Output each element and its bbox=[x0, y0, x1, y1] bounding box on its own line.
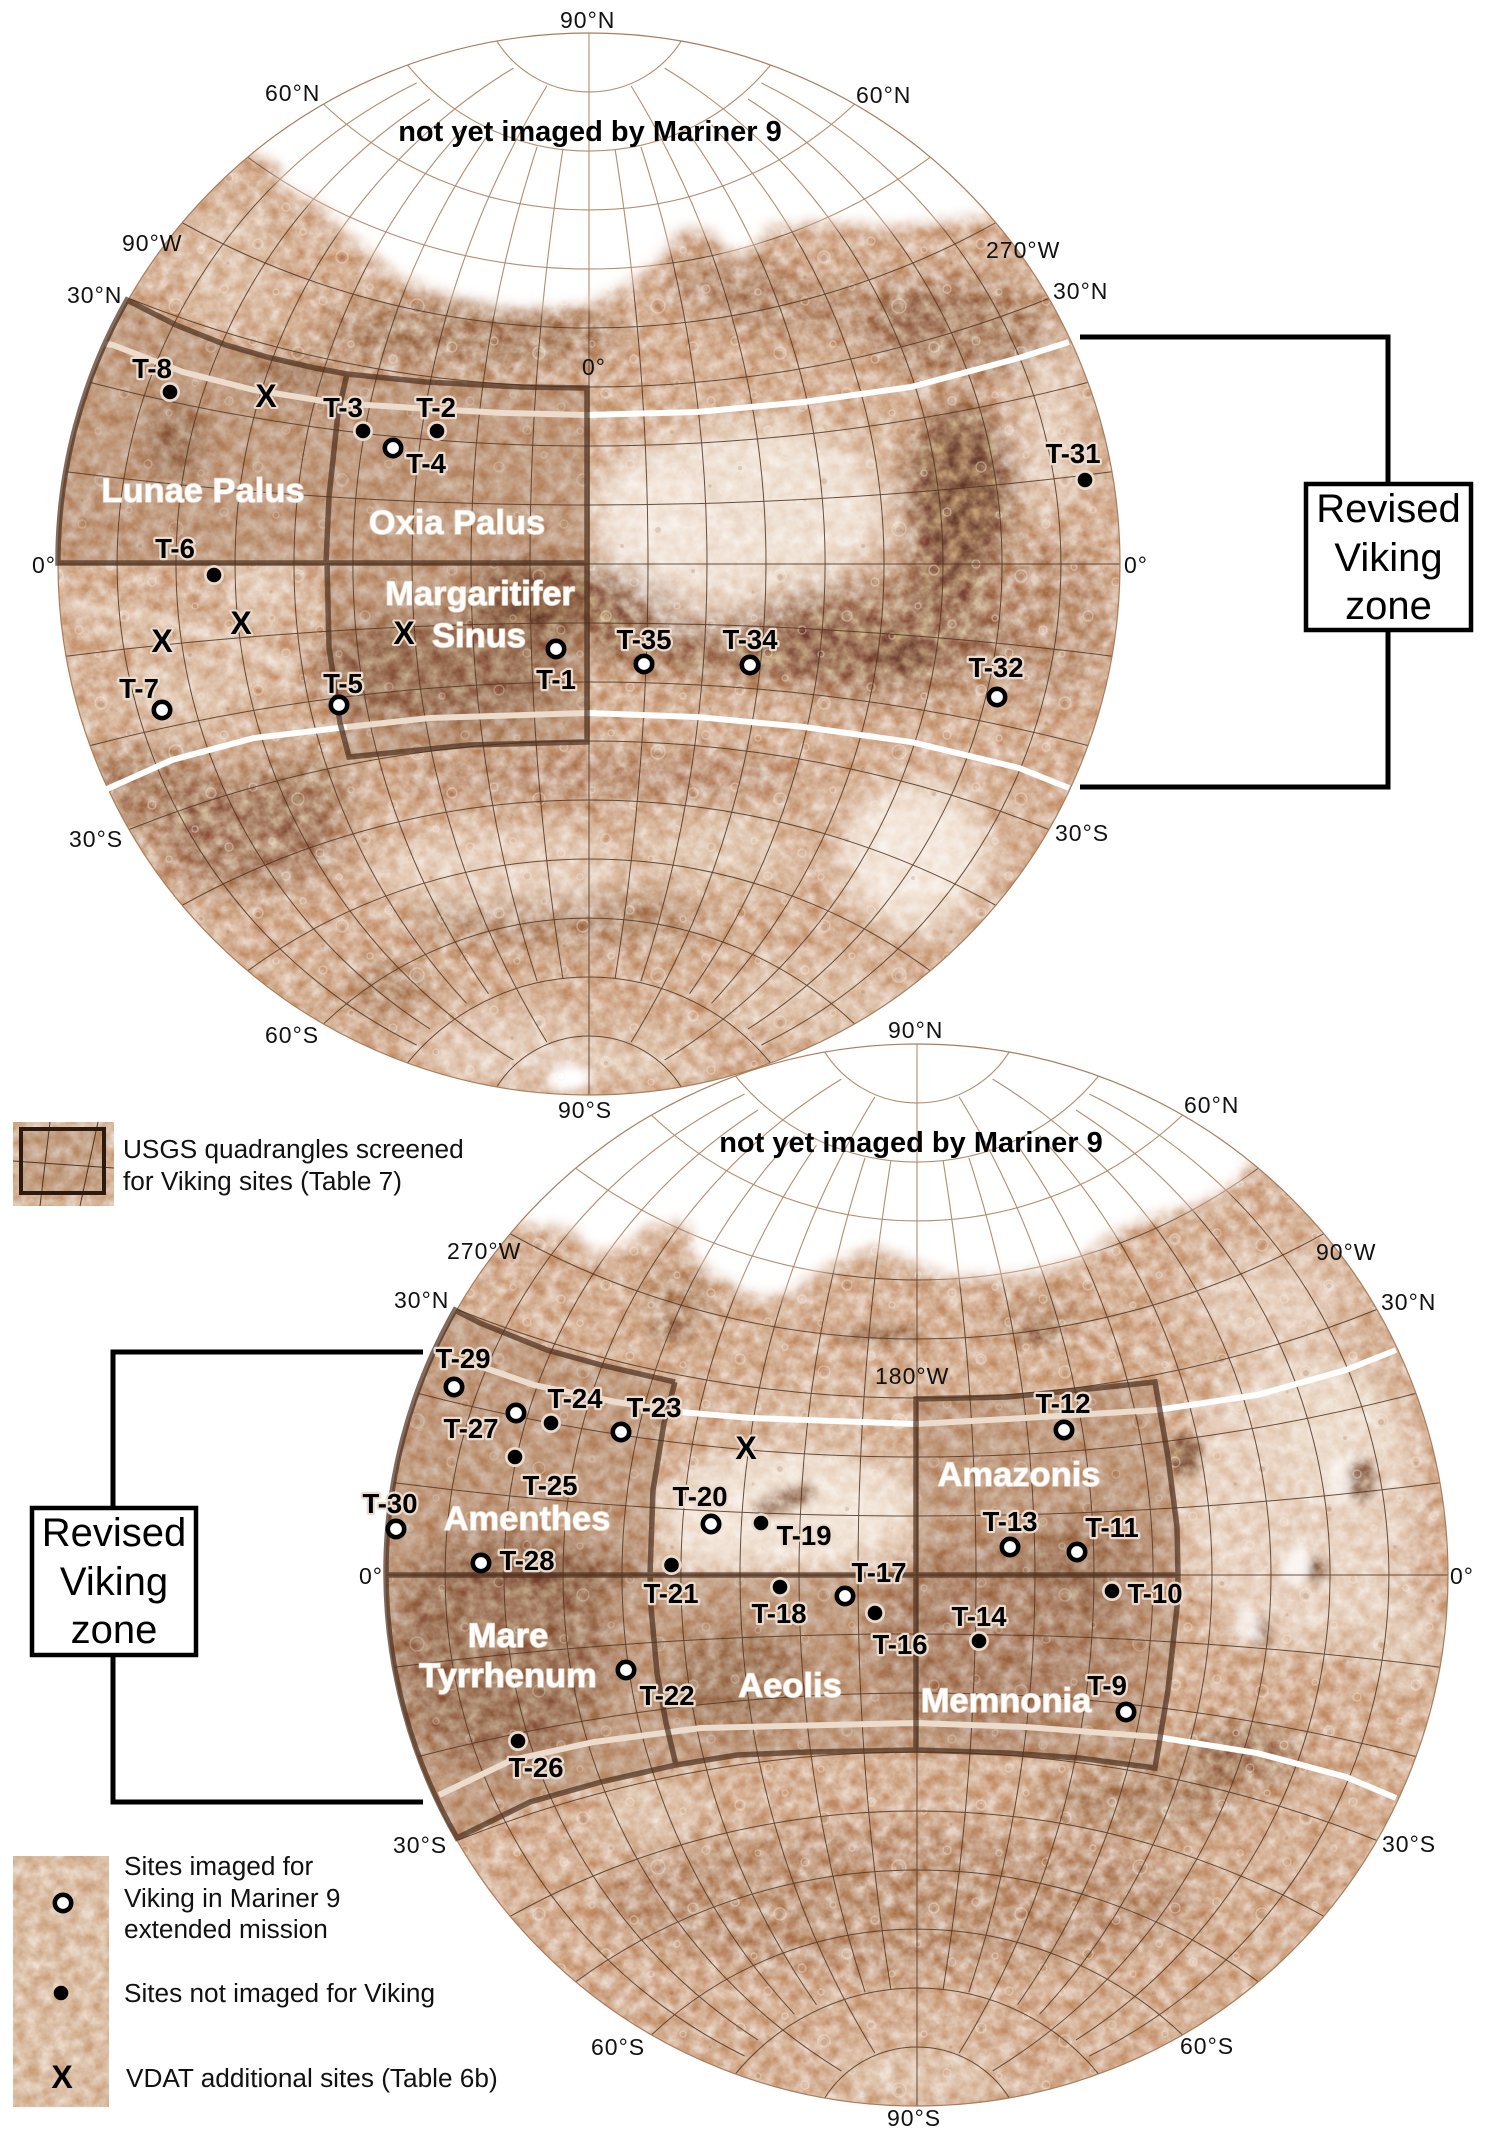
grid labels: 0° bbox=[1124, 552, 1148, 578]
site T-7: T-7 bbox=[119, 673, 159, 704]
grid labels: 90°S bbox=[558, 1097, 612, 1123]
site T-1: T-1 bbox=[536, 664, 576, 695]
site T-1 bbox=[536, 641, 576, 695]
site T-25 bbox=[505, 1447, 578, 1501]
not-yet-imaged caption: not yet imaged by Mariner 9 bbox=[398, 116, 782, 148]
site T-26 bbox=[508, 1731, 564, 1783]
site T-6 bbox=[155, 533, 224, 585]
site T-29: T-29 bbox=[435, 1343, 491, 1374]
site T-27: T-27 bbox=[443, 1413, 499, 1444]
grid labels: 30°S bbox=[393, 1832, 447, 1858]
grid labels: 90°W bbox=[122, 230, 182, 256]
site T-30 bbox=[362, 1488, 418, 1537]
grid labels: 270°W bbox=[986, 237, 1060, 263]
site T-6: T-6 bbox=[155, 533, 195, 564]
region names: Aeolis bbox=[738, 1667, 842, 1705]
region names: Lunae Palus bbox=[101, 472, 305, 510]
site T-23: T-23 bbox=[626, 1392, 682, 1423]
site T-9 bbox=[1087, 1670, 1134, 1720]
site T-31 bbox=[1045, 438, 1101, 490]
site T-11 bbox=[1069, 1512, 1139, 1560]
region names: Mare bbox=[468, 1617, 548, 1655]
site T-21 bbox=[643, 1555, 699, 1609]
zone line: 30S part within quadrangle bbox=[347, 713, 587, 727]
site T-17: T-17 bbox=[851, 1557, 907, 1588]
box: Revised Viking zone, bottom map: Viking bbox=[60, 1560, 168, 1604]
site T-19 bbox=[751, 1513, 832, 1551]
site T-35: T-35 bbox=[616, 624, 672, 655]
VDAT additional sites: X bbox=[151, 623, 173, 659]
site T-32 bbox=[968, 652, 1024, 705]
box: Revised Viking zone, top map: Viking bbox=[1334, 536, 1443, 580]
legend: site symbols bbox=[13, 1851, 498, 2107]
site T-31: T-31 bbox=[1045, 438, 1101, 469]
grid labels: 0° bbox=[1450, 1563, 1474, 1589]
site T-14 bbox=[951, 1601, 1007, 1651]
legend: USGS quadrangles: USGS quadrangles screened bbox=[123, 1134, 464, 1164]
site T-34 bbox=[722, 624, 778, 673]
site T-20 bbox=[672, 1481, 728, 1532]
site T-22 bbox=[618, 1662, 695, 1711]
legend text bbox=[124, 1851, 498, 2093]
zone line: 30N east white bbox=[1157, 1350, 1396, 1410]
site T-11: T-11 bbox=[1085, 1512, 1139, 1543]
zone line: 30S within quadrangles bbox=[439, 1723, 1157, 1795]
site T-4: T-4 bbox=[406, 448, 447, 479]
zone line: 30N west within quadrangle bbox=[435, 1353, 680, 1412]
site T-12 bbox=[1035, 1388, 1091, 1438]
site T-17 bbox=[837, 1557, 907, 1604]
site T-2: T-2 bbox=[416, 392, 456, 423]
site T-13 bbox=[982, 1506, 1038, 1555]
zone line: 30S white bbox=[107, 727, 347, 789]
legend text: VDAT additional sites (Table 6b) bbox=[126, 2063, 498, 2093]
grid labels: 180°W bbox=[875, 1363, 949, 1389]
zone line: 30S east white bbox=[1157, 1737, 1396, 1798]
grid labels: 0° bbox=[359, 1563, 383, 1589]
site T-7 bbox=[119, 673, 170, 718]
site T-9: T-9 bbox=[1087, 1670, 1127, 1701]
legend symbol: VDAT site: X bbox=[51, 2059, 73, 2095]
legend text: extended mission bbox=[124, 1914, 328, 1944]
region names bbox=[419, 1456, 1100, 1720]
grid labels: 30°N bbox=[1381, 1289, 1436, 1315]
site T-28: T-28 bbox=[499, 1545, 555, 1576]
grid labels: 90°N bbox=[888, 1017, 943, 1043]
grid labels: 60°S bbox=[265, 1022, 319, 1048]
bracket: revised Viking zone, bottom map bbox=[113, 1352, 423, 1802]
zone line: 30N white bbox=[587, 342, 1069, 415]
zone line: 30N part within quadrangles bbox=[105, 344, 587, 415]
box: Revised Viking zone, bottom map: Revised bbox=[42, 1511, 186, 1555]
grid labels: 90°W bbox=[1316, 1239, 1376, 1265]
bottom globe: Mars hemisphere centred on 180° bbox=[359, 1017, 1474, 2131]
legend: USGS quadrangles: for Viking sites (Table 7) bbox=[123, 1166, 402, 1196]
site T-12: T-12 bbox=[1035, 1388, 1091, 1419]
box: Revised Viking zone, top map: zone bbox=[1345, 584, 1432, 628]
region names: Amenthes bbox=[444, 1500, 610, 1538]
bracket: revised Viking zone, top map bbox=[1080, 337, 1388, 787]
site T-3 bbox=[323, 392, 373, 441]
site T-16: T-16 bbox=[872, 1629, 928, 1660]
legend symbol: imaged site bbox=[55, 1895, 71, 1911]
map rim bbox=[58, 33, 1120, 1095]
zone line: 30N within Amazonis bbox=[916, 1410, 1157, 1424]
region names: Amazonis bbox=[938, 1456, 1100, 1494]
USGS quadrangle outlines bbox=[58, 300, 587, 757]
site T-8 bbox=[132, 353, 180, 402]
site T-35 bbox=[616, 624, 672, 672]
site T-16 bbox=[865, 1603, 928, 1660]
site T-14: T-14 bbox=[951, 1601, 1007, 1632]
grid labels: 60°N bbox=[1184, 1092, 1239, 1118]
VDAT additional sites bbox=[151, 378, 415, 659]
site T-29 bbox=[435, 1343, 491, 1395]
grid labels: 30°S bbox=[1055, 820, 1109, 846]
grid labels: 90°N bbox=[560, 7, 615, 33]
region names: Margaritifer bbox=[385, 575, 575, 613]
site T-5: T-5 bbox=[323, 668, 363, 699]
not-yet-imaged caption: not yet imaged by Mariner 9 bbox=[719, 1127, 1103, 1159]
region names: Tyrrhenum bbox=[419, 1657, 597, 1695]
grid labels: 60°S bbox=[591, 2034, 645, 2060]
grid labels: 60°S bbox=[1180, 2033, 1234, 2059]
region names bbox=[101, 472, 575, 655]
site T-34: T-34 bbox=[722, 624, 778, 655]
site T-10: T-10 bbox=[1127, 1578, 1183, 1609]
legend text: Sites imaged for bbox=[124, 1851, 313, 1881]
grid labels bbox=[32, 7, 1148, 1123]
map rim bbox=[386, 1044, 1448, 2106]
box: Revised Viking zone, bottom map: zone bbox=[71, 1608, 157, 1652]
site T-22: T-22 bbox=[639, 1680, 695, 1711]
box: Revised Viking zone, bottom map bbox=[32, 1508, 196, 1655]
grid labels: 30°S bbox=[69, 826, 123, 852]
grid labels: 60°N bbox=[856, 82, 911, 108]
site T-4 bbox=[385, 440, 447, 479]
top globe: Mars hemisphere centred on 0° bbox=[32, 0, 1148, 1123]
grid labels bbox=[359, 1017, 1474, 2131]
site T-32: T-32 bbox=[968, 652, 1024, 683]
grid labels: 30°N bbox=[1053, 278, 1108, 304]
grid labels: 90°S bbox=[887, 2105, 941, 2131]
region names: Sinus bbox=[432, 617, 526, 655]
grid labels: 270°W bbox=[447, 1238, 521, 1264]
grid labels: 0° bbox=[32, 552, 56, 578]
site T-23 bbox=[613, 1392, 682, 1440]
VDAT additional site: X bbox=[735, 1430, 757, 1466]
site T-5 bbox=[323, 668, 363, 713]
VDAT additional sites: X bbox=[393, 615, 415, 651]
grid labels: 30°N bbox=[67, 282, 122, 308]
grid labels: 0° bbox=[582, 354, 606, 380]
legend text: Viking in Mariner 9 bbox=[124, 1883, 340, 1913]
site T-30: T-30 bbox=[362, 1488, 418, 1519]
site T-13: T-13 bbox=[982, 1506, 1038, 1537]
grid labels: 30°N bbox=[394, 1287, 449, 1313]
grid labels: 60°N bbox=[265, 80, 320, 106]
site T-8: T-8 bbox=[132, 353, 172, 384]
site T-2 bbox=[416, 392, 456, 441]
box: Revised Viking zone, top map bbox=[1306, 484, 1471, 630]
site T-24 bbox=[541, 1383, 603, 1433]
site T-18: T-18 bbox=[751, 1598, 807, 1629]
map surface: bottom hemisphere bbox=[386, 1020, 1448, 2106]
site T-28 bbox=[473, 1545, 555, 1576]
site T-10 bbox=[1102, 1578, 1183, 1609]
map surface: top hemisphere bbox=[58, 0, 1120, 1095]
site T-26: T-26 bbox=[508, 1752, 564, 1783]
VDAT additional sites: X bbox=[230, 605, 252, 641]
site T-19: T-19 bbox=[776, 1520, 832, 1551]
site T-27 bbox=[443, 1405, 524, 1444]
site T-25: T-25 bbox=[522, 1470, 578, 1501]
zone line: 30S white east bbox=[587, 713, 1069, 788]
box: Revised Viking zone, top map: Revised bbox=[1316, 487, 1461, 531]
zone line: 30N middle white bbox=[680, 1412, 916, 1424]
site T-24: T-24 bbox=[547, 1383, 603, 1414]
site T-21: T-21 bbox=[643, 1578, 699, 1609]
site T-18 bbox=[751, 1577, 807, 1629]
legend swatch bbox=[13, 1856, 109, 2107]
VDAT additional sites: X bbox=[255, 378, 277, 414]
legend: USGS quadrangles bbox=[13, 1122, 464, 1206]
site T-20: T-20 bbox=[672, 1481, 728, 1512]
grid labels: 30°S bbox=[1382, 1831, 1436, 1857]
legend text: Sites not imaged for Viking bbox=[124, 1978, 435, 2008]
site T-3: T-3 bbox=[323, 392, 363, 423]
region names: Memnonia bbox=[921, 1682, 1092, 1720]
USGS quadrangle outlines bbox=[386, 1310, 1178, 1838]
region names: Oxia Palus bbox=[369, 504, 545, 542]
legend symbol: site not imaged bbox=[54, 1986, 68, 2000]
